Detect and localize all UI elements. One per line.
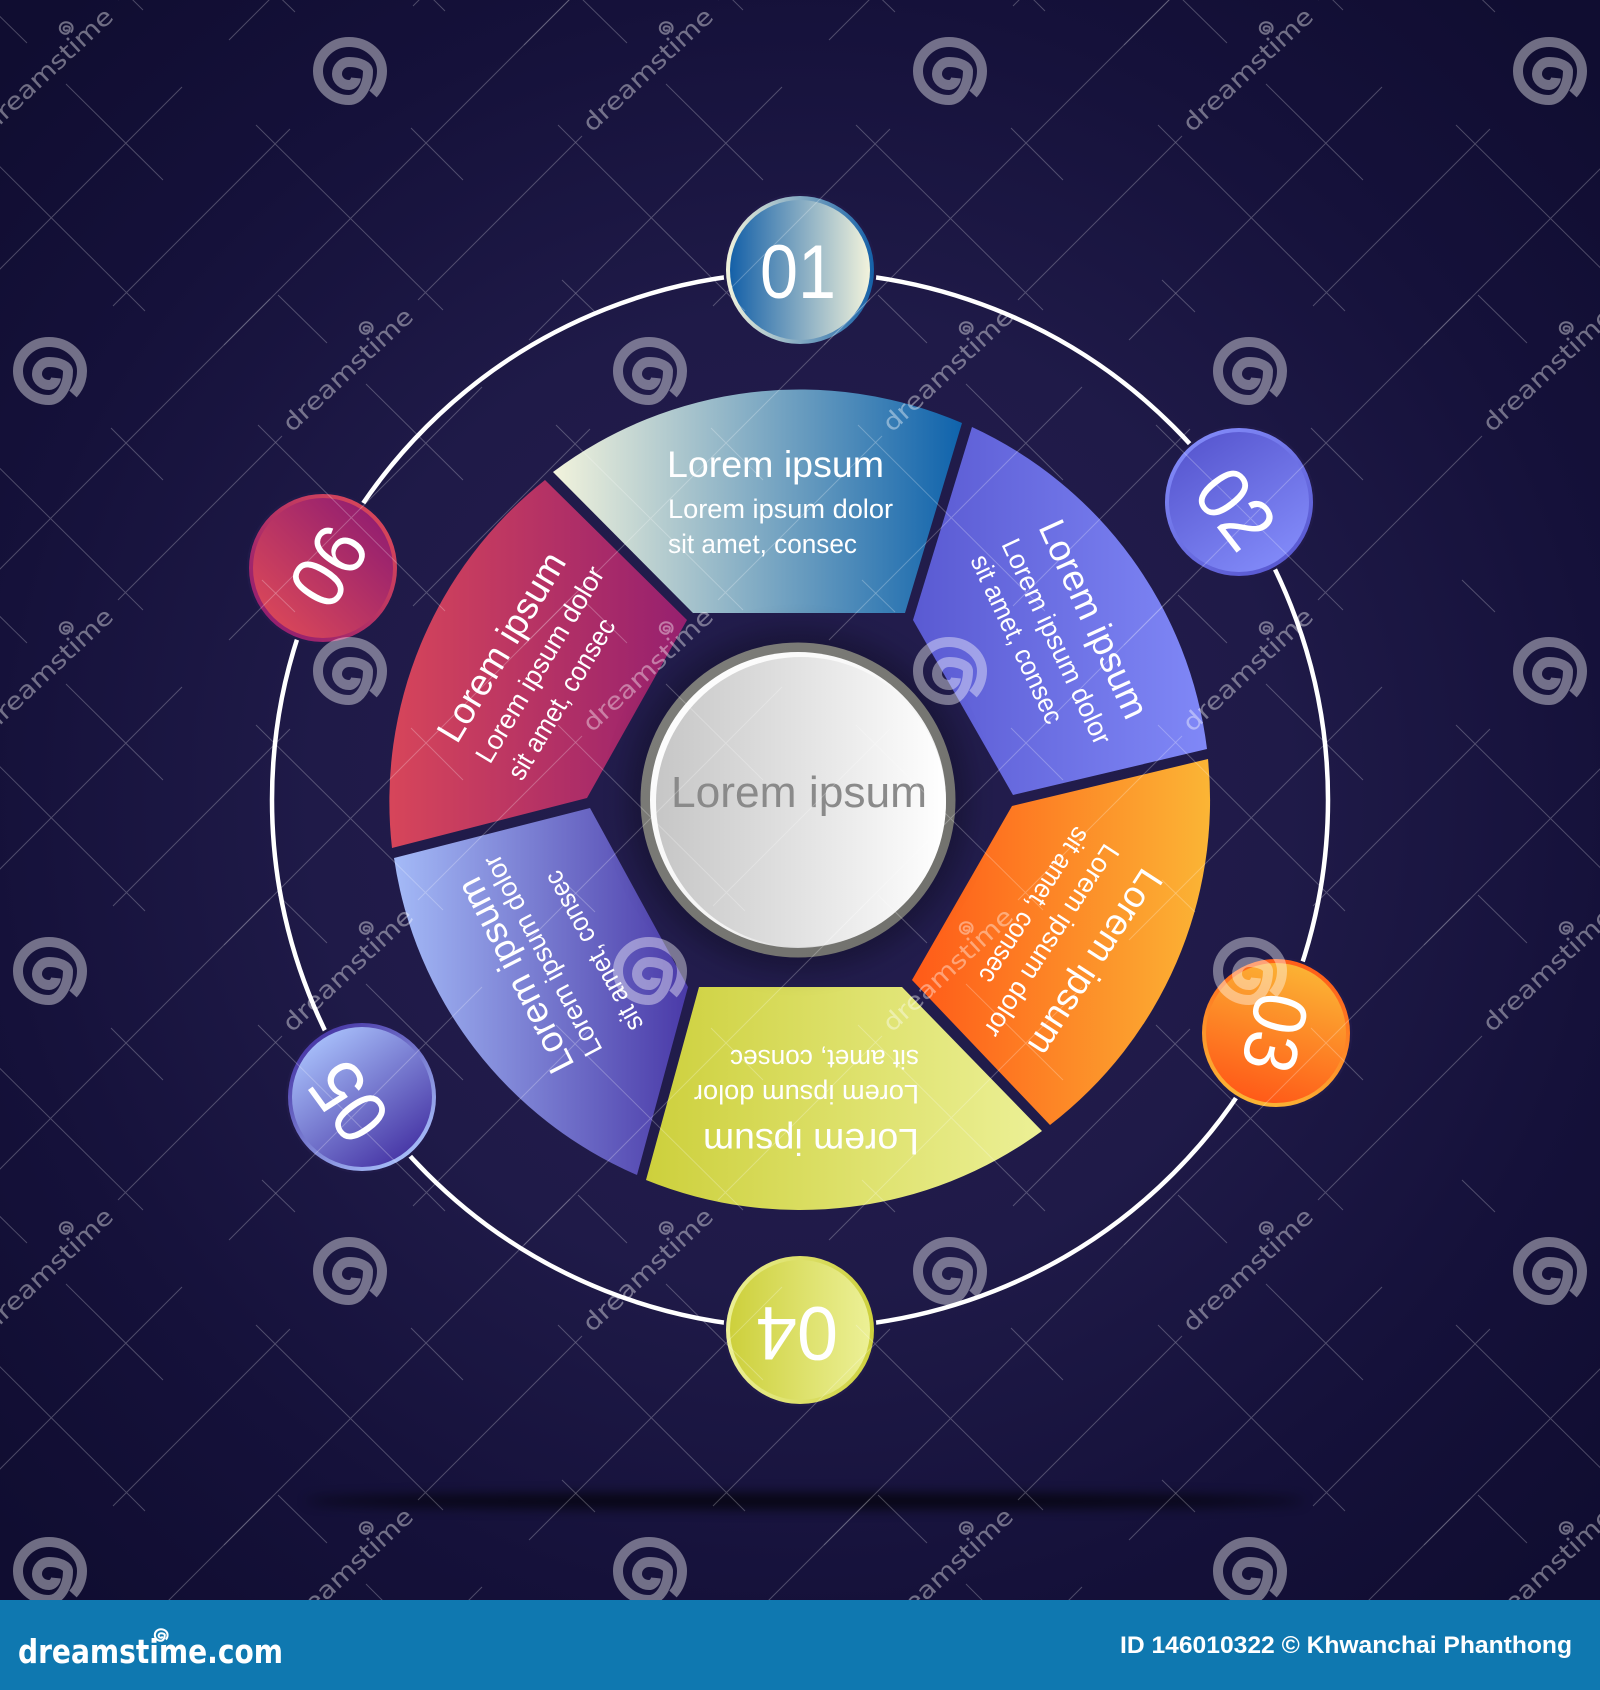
panel: segment 04 [646, 987, 1042, 1210]
badge 05 [286, 1020, 438, 1174]
segment 02 text: sit amet, consec [965, 550, 1069, 728]
segment 02 text [965, 513, 1157, 749]
badge 03: 03 [1224, 985, 1325, 1080]
panel: segment 02 [913, 427, 1207, 795]
segment 06 text: sit amet, consec [501, 613, 621, 785]
badge 04: 04 [756, 1290, 838, 1375]
footer bar [0, 1600, 1600, 1690]
centre disc [626, 628, 970, 972]
segment 01 text [667, 444, 893, 559]
segment 01 text: Lorem ipsum [667, 444, 884, 485]
segment 04 text: sit amet, consec [730, 1044, 919, 1074]
badge 05: 05 [292, 1045, 407, 1158]
segment 05 text: Lorem ipsum dolor [477, 850, 608, 1061]
badge 03 [1200, 956, 1352, 1110]
segment 02 text: Lorem ipsum [1031, 513, 1157, 725]
badge 02 [1162, 426, 1316, 578]
floor shadow [305, 1493, 1305, 1509]
segment 04 text: Lorem ipsum dolor [694, 1079, 919, 1109]
panel: segment 03 [912, 759, 1210, 1125]
badge 04 [724, 1254, 876, 1406]
segment 03 text: sit amet, consec [973, 822, 1096, 989]
outer ring [272, 272, 1328, 1328]
centre label: Lorem ipsum [671, 768, 927, 817]
segment 05 text: sit amet, consec [538, 866, 649, 1036]
footer logo: dreamstime.com [18, 1632, 283, 1671]
segment 05 text [449, 850, 649, 1080]
segment 04 text: Lorem ipsum [703, 1121, 919, 1162]
segment 03 text: Lorem ipsum dolor [978, 839, 1125, 1043]
badge 01: 01 [760, 230, 836, 315]
segment 03 text [973, 822, 1171, 1063]
segment 02 text: Lorem ipsum dolor [996, 534, 1117, 749]
badge 02: 02 [1177, 452, 1292, 566]
segment 05 text: Lorem ipsum [449, 871, 582, 1080]
badge 06 [246, 492, 400, 644]
segment 01 text: sit amet, consec [668, 529, 857, 559]
segment 06 text: Lorem ipsum [429, 545, 574, 749]
panel: segment 01 [553, 389, 962, 613]
panel: segment 06 [389, 480, 687, 848]
segment 03 text: Lorem ipsum [1020, 862, 1171, 1063]
panel: segment 05 [394, 808, 688, 1175]
badge 06: 06 [273, 511, 386, 622]
segment 06 text: Lorem ipsum dolor [469, 561, 610, 768]
segment 01 text: Lorem ipsum dolor [668, 494, 893, 524]
segment 04 text [694, 1044, 919, 1162]
footer credit: ID 146010322 © Khwanchai Phanthong [1120, 1632, 1572, 1659]
badge 01 [724, 194, 876, 346]
segment 06 text [429, 545, 621, 785]
